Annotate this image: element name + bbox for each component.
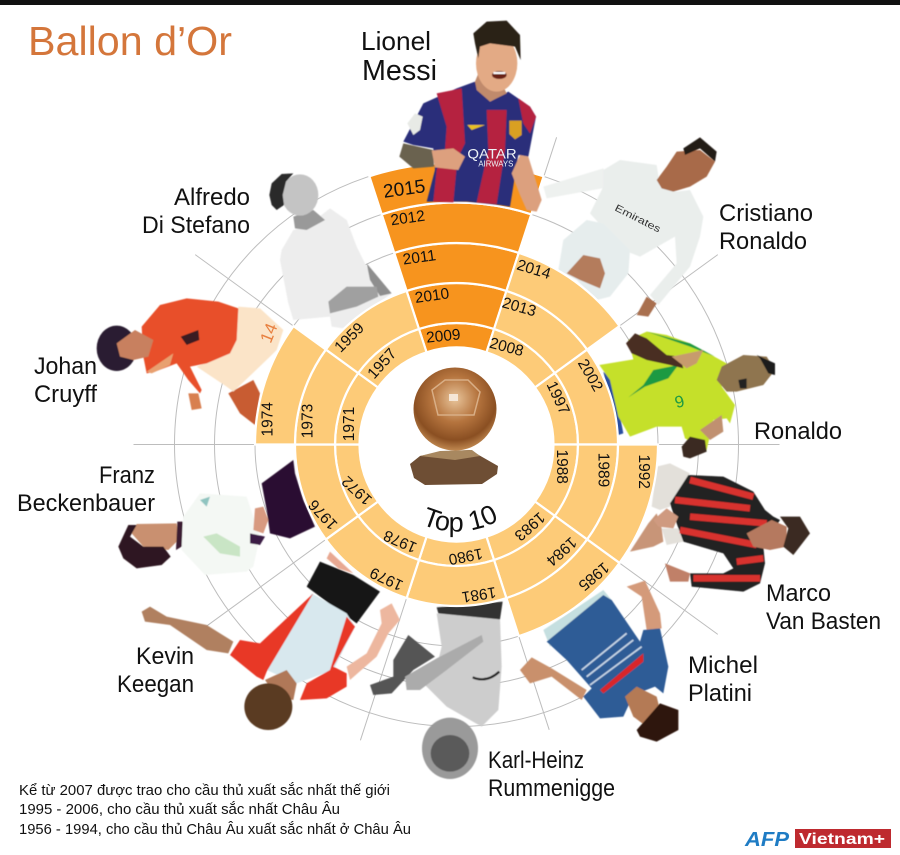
year labels: 1959 bbox=[331, 320, 368, 356]
name: Marco Van Basten bbox=[766, 580, 881, 635]
player photo: Franz Beckenbauer bbox=[118, 460, 315, 575]
year labels: 1997 bbox=[543, 379, 573, 417]
year labels: 1983 bbox=[511, 508, 548, 544]
player photo: Kevin Keegan bbox=[142, 552, 400, 730]
name: Kevin Keegan bbox=[117, 643, 194, 698]
year labels bbox=[260, 176, 652, 605]
year labels: 2011 bbox=[402, 247, 437, 269]
sector: 1957-1959 bbox=[321, 285, 443, 399]
sector: 1978-1979 bbox=[321, 490, 443, 604]
trophy: golden ball bbox=[410, 368, 498, 485]
name: Franz Beckenbauer: Beckenbauer bbox=[17, 490, 155, 517]
year labels: 1989 bbox=[595, 453, 612, 487]
sector: 2008-2014 bbox=[460, 245, 625, 406]
player photo: Cristiano Ronaldo: Emirates bbox=[613, 203, 662, 235]
footnote: Kể từ 2007 được trao cho cầu thủ xuất sắc nhất thế giới bbox=[19, 782, 390, 799]
name: Lionel Messi bbox=[361, 26, 437, 87]
name: Alfredo Di Stefano: Di Stefano bbox=[142, 212, 250, 239]
name: Cristiano Ronaldo bbox=[719, 200, 813, 255]
year labels: 2012 bbox=[390, 208, 426, 229]
name: Franz Beckenbauer bbox=[17, 462, 155, 517]
year labels: 2015 bbox=[382, 176, 427, 203]
year labels: 1971 bbox=[341, 407, 358, 441]
logo: AFP Vietnam+: AFP bbox=[744, 829, 790, 851]
year labels: 1974 bbox=[260, 402, 277, 437]
logo: AFP Vietnam+ bbox=[744, 829, 891, 851]
logo: AFP Vietnam+: Vietnam+ bbox=[799, 831, 885, 848]
year labels: 1981 bbox=[460, 583, 497, 605]
name: Alfredo Di Stefano: Alfredo bbox=[174, 184, 250, 211]
year labels: 1973 bbox=[300, 404, 317, 438]
year labels: 1978 bbox=[381, 526, 420, 556]
player photo: Ronaldo bbox=[599, 332, 775, 458]
player photo: Michel Platini bbox=[520, 581, 678, 742]
name: Karl-Heinz Rummenigge: Rummenigge bbox=[488, 775, 615, 802]
player photo: Karl-Heinz Rummenigge bbox=[370, 602, 503, 779]
name: Kevin Keegan: Keegan bbox=[117, 671, 194, 698]
player photo: Alfredo Di Stefano bbox=[269, 173, 392, 328]
player photo: Lionel Messi: AIRWAYS bbox=[478, 160, 513, 169]
year labels: 1988 bbox=[553, 449, 570, 484]
name: Lionel Messi: Lionel bbox=[361, 26, 431, 56]
player photo: Cristiano Ronaldo bbox=[543, 137, 717, 317]
name: Kevin Keegan: Kevin bbox=[136, 643, 194, 670]
sector: 1983-1985 bbox=[460, 483, 625, 644]
year labels: 1985 bbox=[575, 558, 612, 594]
center label: Top 10: Top 10 bbox=[427, 506, 496, 538]
radial grid bbox=[134, 137, 780, 740]
sector: 1988-1992 bbox=[525, 414, 667, 566]
player photo: Lionel Messi: QATAR bbox=[467, 145, 517, 161]
year labels: 1957 bbox=[365, 345, 400, 382]
name: Marco Van Basten: Marco bbox=[766, 580, 831, 607]
year labels: 2010 bbox=[414, 285, 451, 307]
top black bar bbox=[0, 0, 900, 5]
name: Michel Platini: Michel bbox=[688, 652, 758, 679]
year labels: 2013 bbox=[500, 295, 538, 320]
name: Alfredo Di Stefano bbox=[142, 184, 250, 239]
player photo: Johan Cruyff: 14 bbox=[256, 320, 282, 346]
year labels: 1976 bbox=[305, 496, 341, 533]
title: Ballon d’Or bbox=[28, 18, 232, 64]
player photo: Johan Cruyff bbox=[97, 298, 283, 425]
name: Franz Beckenbauer: Franz bbox=[99, 462, 155, 489]
year labels: 1979 bbox=[367, 563, 406, 593]
name: Johan Cruyff: Cruyff bbox=[34, 381, 97, 408]
name: Karl-Heinz Rummenigge bbox=[488, 747, 615, 802]
name: Lionel Messi: Messi bbox=[362, 55, 437, 87]
name: Ronaldo: Ronaldo bbox=[754, 418, 842, 445]
sector: 1971-1974 bbox=[246, 323, 388, 475]
name: Michel Platini: Platini bbox=[688, 680, 752, 707]
sector: top orange 2009-2015 bbox=[369, 162, 544, 352]
name: Johan Cruyff bbox=[34, 353, 97, 408]
name: Cristiano Ronaldo: Cristiano bbox=[719, 200, 813, 227]
year labels: 1984 bbox=[542, 533, 580, 569]
year labels: 2008 bbox=[488, 335, 525, 360]
player photo: Ronaldo: 9 bbox=[673, 391, 687, 412]
sector: 1980-1981 bbox=[407, 537, 506, 606]
sector: 1997-2002 bbox=[529, 347, 626, 463]
player photo: Marco Van Basten bbox=[630, 463, 810, 592]
name: Michel Platini bbox=[688, 652, 758, 707]
name: Karl-Heinz Rummenigge: Karl-Heinz bbox=[488, 747, 584, 774]
year labels: 2014 bbox=[515, 257, 553, 283]
name: Cristiano Ronaldo: Ronaldo bbox=[719, 228, 807, 255]
year labels: 1972 bbox=[339, 472, 376, 508]
year labels: 2009 bbox=[425, 326, 461, 347]
name: Johan Cruyff: Johan bbox=[34, 353, 97, 380]
year labels: 1992 bbox=[635, 454, 652, 489]
player photo: Lionel Messi bbox=[399, 21, 542, 212]
footnote: 1956 - 1994, cho cầu thủ Châu Âu xuất sắc nhất ở Châu Âu bbox=[19, 821, 411, 838]
center white hole bbox=[360, 348, 554, 542]
year labels: 1980 bbox=[447, 544, 484, 568]
year labels: 2002 bbox=[574, 356, 606, 395]
footnote: 1995 - 2006, cho cầu thủ xuất sắc nhất Châu Âu bbox=[19, 801, 340, 818]
name: Marco Van Basten: Van Basten bbox=[766, 608, 881, 635]
polar chart sectors bbox=[246, 162, 667, 644]
footnote bbox=[19, 782, 411, 838]
sector: 1972-1976 bbox=[287, 426, 384, 542]
